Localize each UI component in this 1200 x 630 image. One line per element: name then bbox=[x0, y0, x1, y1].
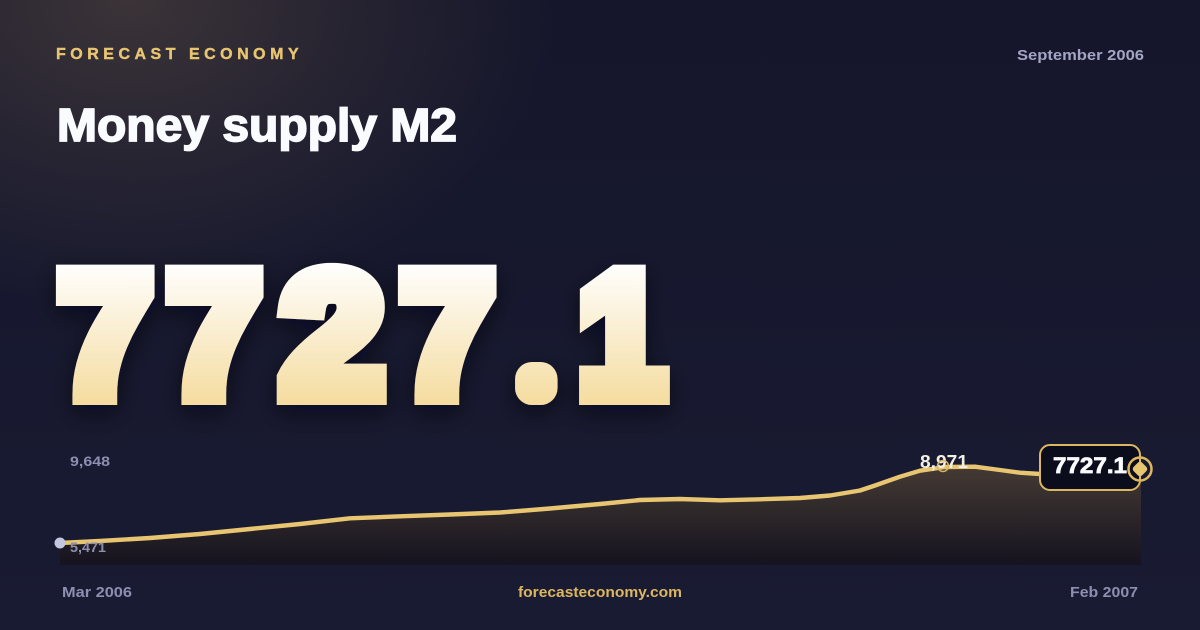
big value: 7 bbox=[168, 238, 260, 431]
peak value label: 8,971 bbox=[920, 452, 968, 472]
chart line bbox=[60, 467, 1141, 543]
start point marker bbox=[54, 538, 66, 548]
line chart bbox=[60, 467, 1141, 565]
current value callout bbox=[1040, 445, 1140, 490]
max axis label: 9,648 bbox=[70, 453, 110, 469]
big value: 7 bbox=[59, 238, 151, 431]
big value: 2 bbox=[282, 239, 382, 431]
start date: Mar 2006 bbox=[62, 584, 132, 601]
date label: September 2006 bbox=[1017, 47, 1144, 64]
title: Money supply M2 bbox=[57, 99, 457, 151]
big value: 1 bbox=[579, 239, 664, 431]
chart area bbox=[60, 467, 1141, 565]
big value bbox=[59, 238, 664, 431]
current value callout: 7727.1 bbox=[1053, 453, 1127, 478]
brand label: FORECAST ECONOMY bbox=[56, 46, 303, 63]
website: forecasteconomy.com bbox=[518, 584, 682, 601]
big value: 7 bbox=[401, 238, 493, 431]
big value: . bbox=[528, 334, 545, 401]
current point marker bbox=[1128, 458, 1152, 480]
min axis label: 5,471 bbox=[70, 539, 106, 555]
peak marker bbox=[938, 460, 948, 472]
end date: Feb 2007 bbox=[1070, 584, 1138, 601]
